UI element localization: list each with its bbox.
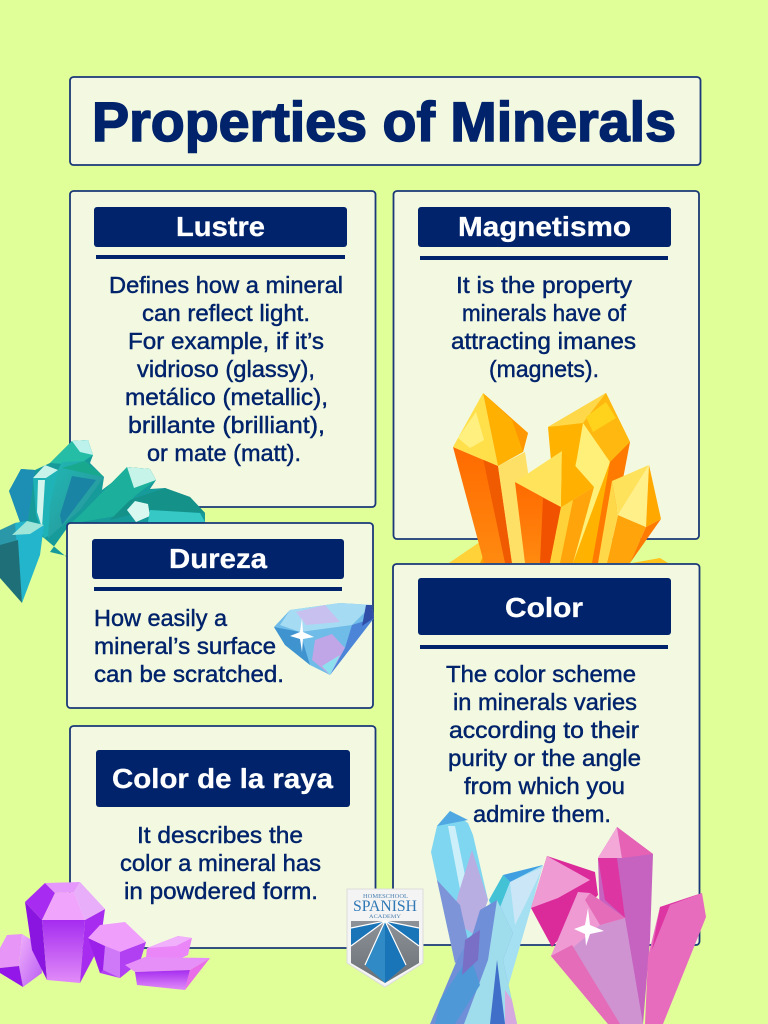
text: Magnetismo description: It is the property: [456, 272, 633, 298]
text: Color description: according to their: [449, 717, 639, 743]
text: Color description: The color scheme: [446, 661, 636, 687]
text: Color description: purity or the angle: [448, 745, 641, 771]
heading: Color de la raya: Color de la raya: [112, 763, 333, 794]
panel: Color: [393, 564, 700, 945]
icon: orange crystals: [449, 393, 668, 563]
icon: pink crystals: [531, 827, 706, 1024]
text: Lustre description: [109, 272, 343, 466]
panel: Color de la raya: [70, 726, 376, 948]
heading bar: Magnetismo: [418, 207, 671, 247]
text: Color description: in minerals varies: [453, 689, 637, 715]
text: Color description: from which you: [464, 773, 625, 799]
heading: Lustre: Lustre: [176, 211, 265, 242]
heading: Dureza: Dureza: [169, 543, 267, 574]
text: Magnetismo description: [451, 272, 636, 382]
text: Dureza description: How easily a: [94, 605, 227, 631]
logo: Homeschool Spanish Academy: ACADEMY: [369, 914, 401, 920]
title: Properties of Minerals: [92, 90, 676, 153]
heading bar: Color: [418, 578, 671, 635]
heading bar: Dureza: [92, 539, 344, 579]
text: Lustre description: Defines how a mineral: [109, 272, 343, 298]
text: Dureza description: can be scratched.: [94, 661, 284, 687]
text: Color de la raya description: color a mineral has: [120, 850, 321, 876]
text: Lustre description: For example, if it’s: [128, 328, 324, 354]
text: Dureza description: mineral’s surface: [94, 633, 276, 659]
text: Magnetismo description: attracting imanes: [451, 328, 636, 354]
text: Color description: admire them.: [473, 801, 611, 827]
logo: Homeschool Spanish Academy: [347, 889, 423, 987]
text: Lustre description: brillante (brilliant),: [128, 412, 325, 438]
panel: Magnetismo: [394, 191, 699, 539]
text: Color de la raya description: [120, 822, 321, 904]
heading bar: Lustre: [94, 207, 347, 247]
text: Color de la raya description: in powdered form.: [124, 878, 318, 904]
logo shield rays: [351, 921, 419, 983]
icon: purple crystals: [0, 882, 210, 990]
text: Dureza description: [94, 605, 284, 687]
logo text: HOMESCHOOL: [363, 894, 408, 900]
text: Magnetismo description: minerals have of: [462, 300, 627, 326]
panel: Lustre: [70, 191, 376, 507]
heading: Color: Color: [505, 592, 583, 623]
text: Color de la raya description: It describes the: [137, 822, 303, 848]
icon: teal crystals: [0, 440, 205, 603]
icon: blue crystals: [430, 811, 543, 1024]
text: Lustre description: or mate (matt).: [147, 440, 301, 466]
text: Color description: [446, 661, 641, 827]
logo: Homeschool Spanish Academy: SPANISH: [353, 898, 417, 915]
panel: Dureza: [67, 523, 373, 708]
icon: diamond: [274, 603, 374, 675]
heading bar: Color de la raya: [96, 750, 350, 807]
text: Lustre description: vidrioso (glassy),: [137, 356, 315, 382]
text: Magnetismo description: (magnets).: [489, 356, 599, 382]
text: Lustre description: metálico (metallic),: [125, 384, 328, 410]
text: Lustre description: can reflect light.: [142, 300, 310, 326]
title panel: [70, 77, 700, 165]
heading: Magnetismo: Magnetismo: [458, 211, 631, 242]
